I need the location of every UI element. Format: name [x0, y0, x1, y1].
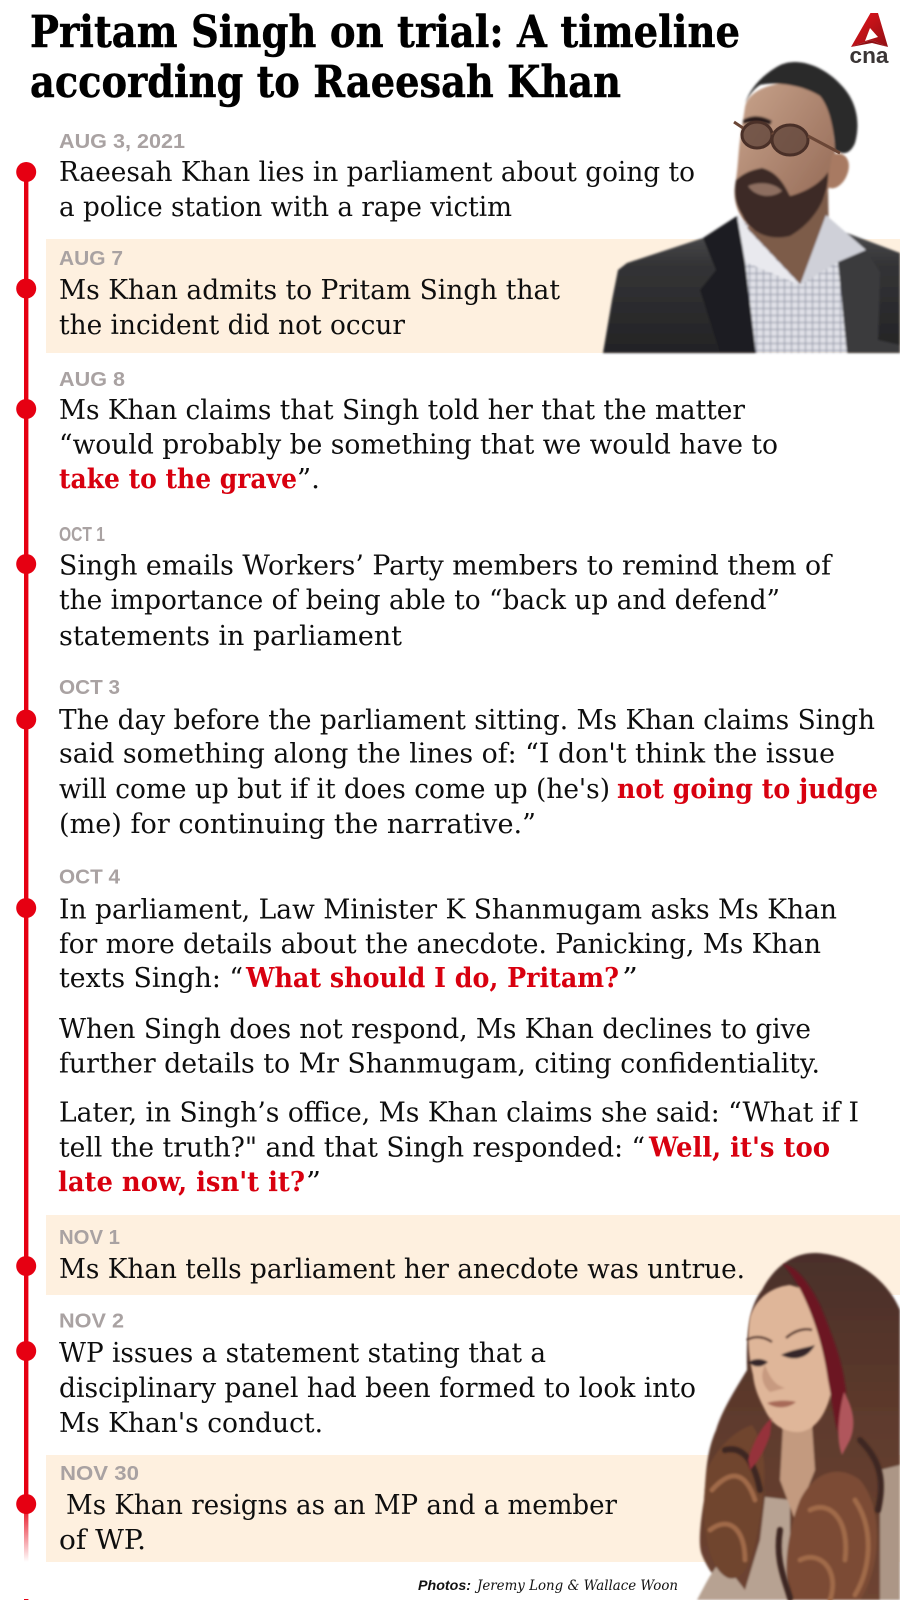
entry: Aug 3, 2021 — [59, 131, 695, 223]
title — [30, 7, 740, 108]
entry: Oct 4: for more details about the anecdote. Panicking, Ms Khan — [59, 928, 821, 960]
logo: CNA: cna — [850, 43, 889, 68]
entry: Oct 4: OCT 4 — [59, 866, 121, 888]
entry: Nov 2 — [59, 1310, 696, 1439]
photo credit: Photos: — [418, 1577, 471, 1593]
entry: Oct 3: will come up but if it does come up (he's) — [59, 773, 610, 805]
photo: Pritam Singh — [603, 62, 900, 353]
entry: Oct 3: said something along the lines of: “I don't think the issue — [59, 738, 835, 770]
entry: Oct 1: Singh emails Workers’ Party members to remind them of — [59, 550, 833, 582]
entry: Nov 30: Ms Khan resigns as an MP and a member — [66, 1489, 618, 1521]
photo credit: Jeremy Long & Wallace Woon — [474, 1578, 678, 1594]
entry: Oct 4: Later, in Singh’s office, Ms Khan claims she said: “What if I — [59, 1096, 859, 1128]
entry: Aug 8: ”. — [297, 463, 320, 495]
entry: Oct 3 — [59, 677, 878, 840]
entry: Nov 1: Ms Khan tells parliament her anecdote was untrue. — [59, 1253, 745, 1285]
entry: Aug 8: AUG 8 — [59, 369, 125, 391]
glasses — [742, 122, 808, 155]
entry: Nov 30: of WP. — [59, 1524, 146, 1556]
entry: Oct 1: OCT 1 — [59, 524, 105, 546]
entry: Oct 4: When Singh does not respond, Ms Khan declines to give — [59, 1013, 811, 1045]
entry: Nov 30 — [46, 1455, 900, 1562]
entry: Nov 1: NOV 1 — [59, 1227, 120, 1249]
entry: Aug 3, 2021: a police station with a rape victim — [59, 191, 512, 223]
title: according to Raeesah Khan — [30, 57, 621, 108]
entry: Aug 8: Ms Khan claims that Singh told her that the matter — [59, 394, 746, 426]
entry: Nov 2: NOV 2 — [59, 1310, 124, 1332]
entry: Aug 8: take to the grave — [59, 463, 297, 495]
entry: Oct 4: texts Singh: “ — [59, 962, 243, 994]
entry: Oct 1: statements in parliament — [59, 620, 402, 652]
timeline line with dots — [16, 162, 36, 1600]
entry: Nov 2: WP issues a statement stating that a — [59, 1337, 546, 1369]
title: Pritam Singh on trial: A timeline — [30, 7, 740, 58]
entry: Aug 8: “would probably be something that we would have to — [59, 428, 778, 460]
entry: Oct 1 — [59, 524, 833, 652]
entry: Aug 7: the incident did not occur — [59, 309, 406, 341]
entry: Aug 3, 2021: Raeesah Khan lies in parliament about going to — [59, 156, 695, 188]
entry: Oct 3: (me) for continuing the narrative.” — [59, 808, 536, 840]
entry: Oct 4: ” — [622, 962, 638, 994]
entry: Oct 3: OCT 3 — [59, 677, 120, 699]
entry: Oct 1: the importance of being able to “back up and defend” — [59, 584, 780, 616]
entry: Aug 7 — [46, 239, 900, 353]
photo: Raeesah Khan — [697, 1253, 900, 1600]
entry: Aug 7: Ms Khan admits to Pritam Singh that — [59, 274, 560, 306]
entry: Aug 8 — [59, 369, 778, 495]
entry: Oct 4: further details to Mr Shanmugam, citing confidentiality. — [59, 1048, 820, 1080]
entry: Nov 1 — [46, 1215, 900, 1295]
entry: Aug 7: AUG 7 — [59, 248, 123, 270]
entry: Oct 3: The day before the parliament sitting. Ms Khan claims Singh — [59, 704, 875, 736]
entry: Oct 4: tell the truth?" and that Singh responded: “ — [59, 1132, 645, 1164]
entry: Oct 4: What should I do, Pritam? — [245, 962, 619, 994]
entry: Nov 30: NOV 30 — [60, 1463, 139, 1485]
entry: Oct 4: Well, it's too — [648, 1132, 830, 1164]
entry: Oct 4 — [58, 866, 859, 1198]
logo: CNA — [850, 13, 889, 68]
entry: Oct 3: not going to judge — [617, 773, 878, 805]
entry: Nov 2: disciplinary panel had been formed to look into — [59, 1372, 696, 1404]
entry: Oct 4: ” — [306, 1166, 321, 1198]
entry: Nov 2: Ms Khan's conduct. — [59, 1407, 323, 1439]
entry: Oct 4: late now, isn't it? — [58, 1166, 305, 1198]
entry: Aug 3, 2021: AUG 3, 2021 — [59, 131, 185, 153]
entry: Oct 4: In parliament, Law Minister K Shanmugam asks Ms Khan — [59, 894, 837, 926]
